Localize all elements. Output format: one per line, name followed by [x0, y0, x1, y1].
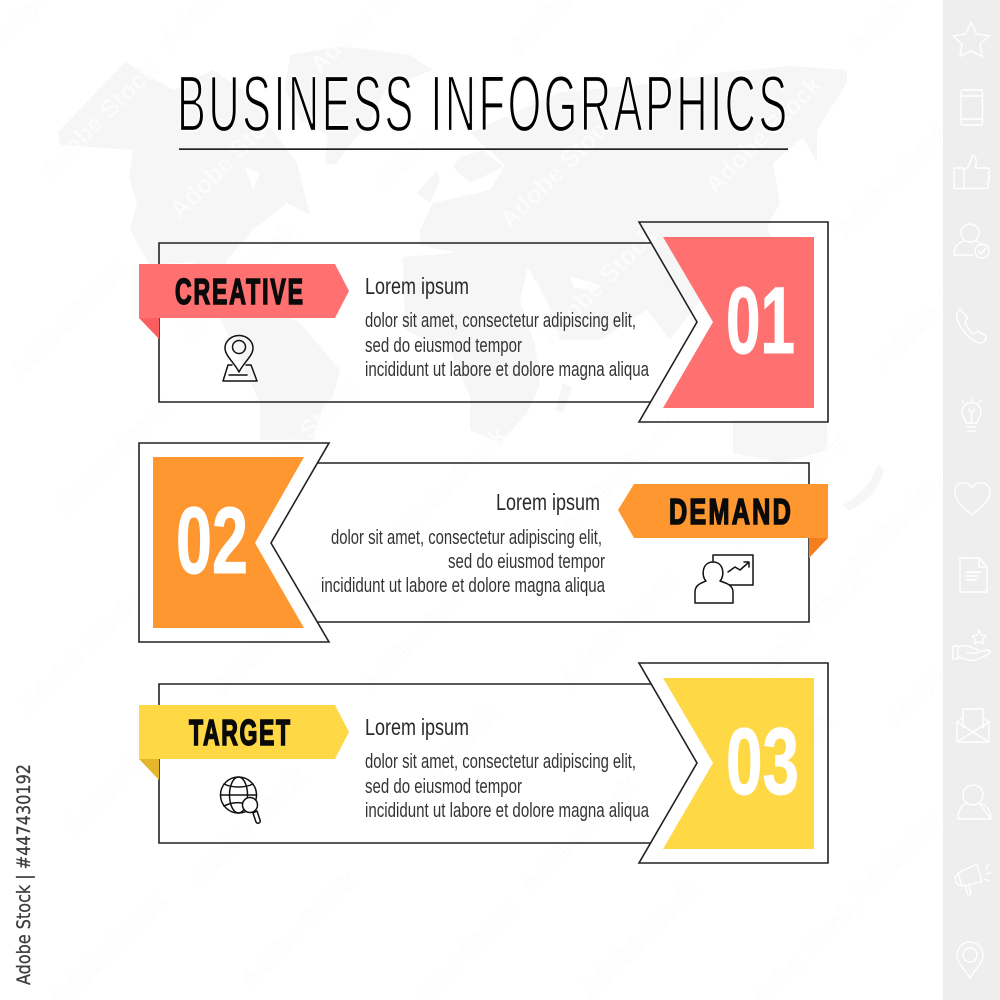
text block — [365, 273, 650, 381]
ribbon fold — [139, 759, 159, 780]
watermark pattern: Adobe Stock — [174, 216, 302, 344]
ribbon fold — [139, 318, 159, 339]
icon: person — [958, 785, 991, 819]
number: 01 — [726, 268, 795, 374]
watermark pattern: Adobe Stock — [514, 771, 642, 899]
title underline — [179, 148, 788, 150]
text block: Lorem ipsum — [496, 489, 600, 515]
icon: open envelope — [957, 709, 989, 742]
watermark pattern: Adobe Stock — [4, 256, 132, 384]
ribbon label: CREATIVE — [175, 273, 303, 312]
watermark pattern: Adobe Stock — [699, 71, 827, 199]
watermark pattern: Adobe Stock — [14, 591, 142, 719]
watermark pattern: Adobe Stock — [59, 711, 187, 839]
watermark pattern: Adobe Stock — [724, 426, 852, 554]
watermark pattern: Adobe Stock — [554, 566, 682, 694]
panel frame — [159, 684, 651, 843]
text block: incididunt ut labore et dolore magna aliqua — [365, 800, 650, 822]
icon: user check — [954, 224, 989, 258]
title: BUSINESS INFOGRAPHICS — [177, 59, 787, 149]
text block: dolor sit amet, consectetur adipiscing elit, — [365, 751, 636, 773]
watermark pattern: Adobe Stock — [384, 421, 512, 549]
number: 03 — [726, 709, 799, 815]
panel frame — [159, 243, 651, 402]
icon: hand with star — [953, 630, 990, 661]
sidebar background — [943, 0, 1000, 1000]
ribbon fold — [809, 538, 828, 558]
icon: tablet — [961, 90, 982, 125]
ribbon — [139, 264, 349, 318]
ribbon — [139, 705, 349, 759]
panel: demand — [139, 443, 828, 642]
icon: megaphone — [955, 864, 991, 895]
icon: location pin — [957, 942, 983, 978]
panel: icon sidebar — [943, 0, 1000, 1000]
ribbon label: DEMAND — [669, 492, 791, 532]
watermark pattern: Adobe Stock — [34, 56, 162, 184]
vertical stock id: Adobe Stock | #447430192 — [13, 764, 35, 985]
watermark pattern: Adobe Stock — [49, 391, 177, 519]
chevron outline — [639, 222, 828, 422]
icon: thumbs up — [954, 155, 990, 188]
icon: star — [953, 22, 989, 56]
panel: creative — [139, 222, 828, 422]
watermark pattern: Adobe Stock — [354, 571, 482, 699]
text block: dolor sit amet, consectetur adipiscing elit, — [331, 527, 602, 549]
map gaps — [245, 167, 600, 315]
watermark pattern: Adobe Stock — [369, 66, 497, 194]
watermark pattern: Adobe Stock — [829, 116, 957, 244]
ribbon — [618, 484, 828, 538]
text block: sed do eiusmod tempor — [448, 551, 605, 573]
watermark pattern: Adobe Stock — [164, 96, 292, 224]
number: 02 — [176, 488, 248, 594]
watermark pattern: Adobe Stock — [839, 451, 967, 579]
text block: sed do eiusmod tempor — [365, 776, 522, 798]
icon: document — [960, 558, 987, 592]
icon: light bulb — [962, 398, 981, 431]
chevron outline — [639, 663, 828, 863]
text block — [365, 714, 650, 822]
icon: heart — [955, 483, 990, 515]
text block: Lorem ipsum — [365, 273, 469, 299]
watermark pattern: Adobe Stock — [844, 781, 972, 909]
panel frame — [317, 463, 809, 622]
watermark pattern: Adobe Stock — [234, 376, 362, 504]
watermark pattern: Adobe Stock — [744, 561, 872, 689]
watermark pattern: Adobe Stock — [714, 706, 842, 834]
text block — [321, 489, 606, 597]
text block: sed do eiusmod tempor — [365, 335, 522, 357]
chevron fill — [663, 237, 814, 408]
watermark pattern: Adobe Stock — [664, 281, 792, 409]
icon: presenter with chart — [695, 555, 753, 603]
world map silhouette — [58, 46, 884, 511]
chevron outline — [139, 443, 329, 642]
text block: dolor sit amet, consectetur adipiscing elit, — [365, 310, 636, 332]
watermark pattern: Adobe Stock — [554, 411, 682, 539]
watermark pattern: Adobe Stock — [234, 866, 362, 994]
chevron fill — [153, 457, 304, 628]
text block: incididunt ut labore et dolore magna aliqua — [321, 575, 606, 597]
icon: telephone — [957, 309, 986, 343]
icon: map pin — [223, 336, 257, 381]
text block: Lorem ipsum — [365, 714, 469, 740]
chevron fill — [663, 678, 814, 849]
ribbon label: TARGET — [189, 714, 291, 753]
watermark pattern: Adobe Stock — [494, 106, 622, 234]
watermark pattern: Adobe Stock — [534, 221, 662, 349]
icon: globe with magnifier — [220, 777, 260, 823]
watermark pattern: Adobe Stock — [184, 761, 312, 889]
watermark pattern: Adobe Stock — [374, 701, 502, 829]
text block: incididunt ut labore et dolore magna aliqua — [365, 359, 650, 381]
watermark pattern: Adobe Stock — [209, 571, 337, 699]
watermark pattern: Adobe Stock — [869, 246, 997, 374]
panel: target — [139, 663, 828, 863]
